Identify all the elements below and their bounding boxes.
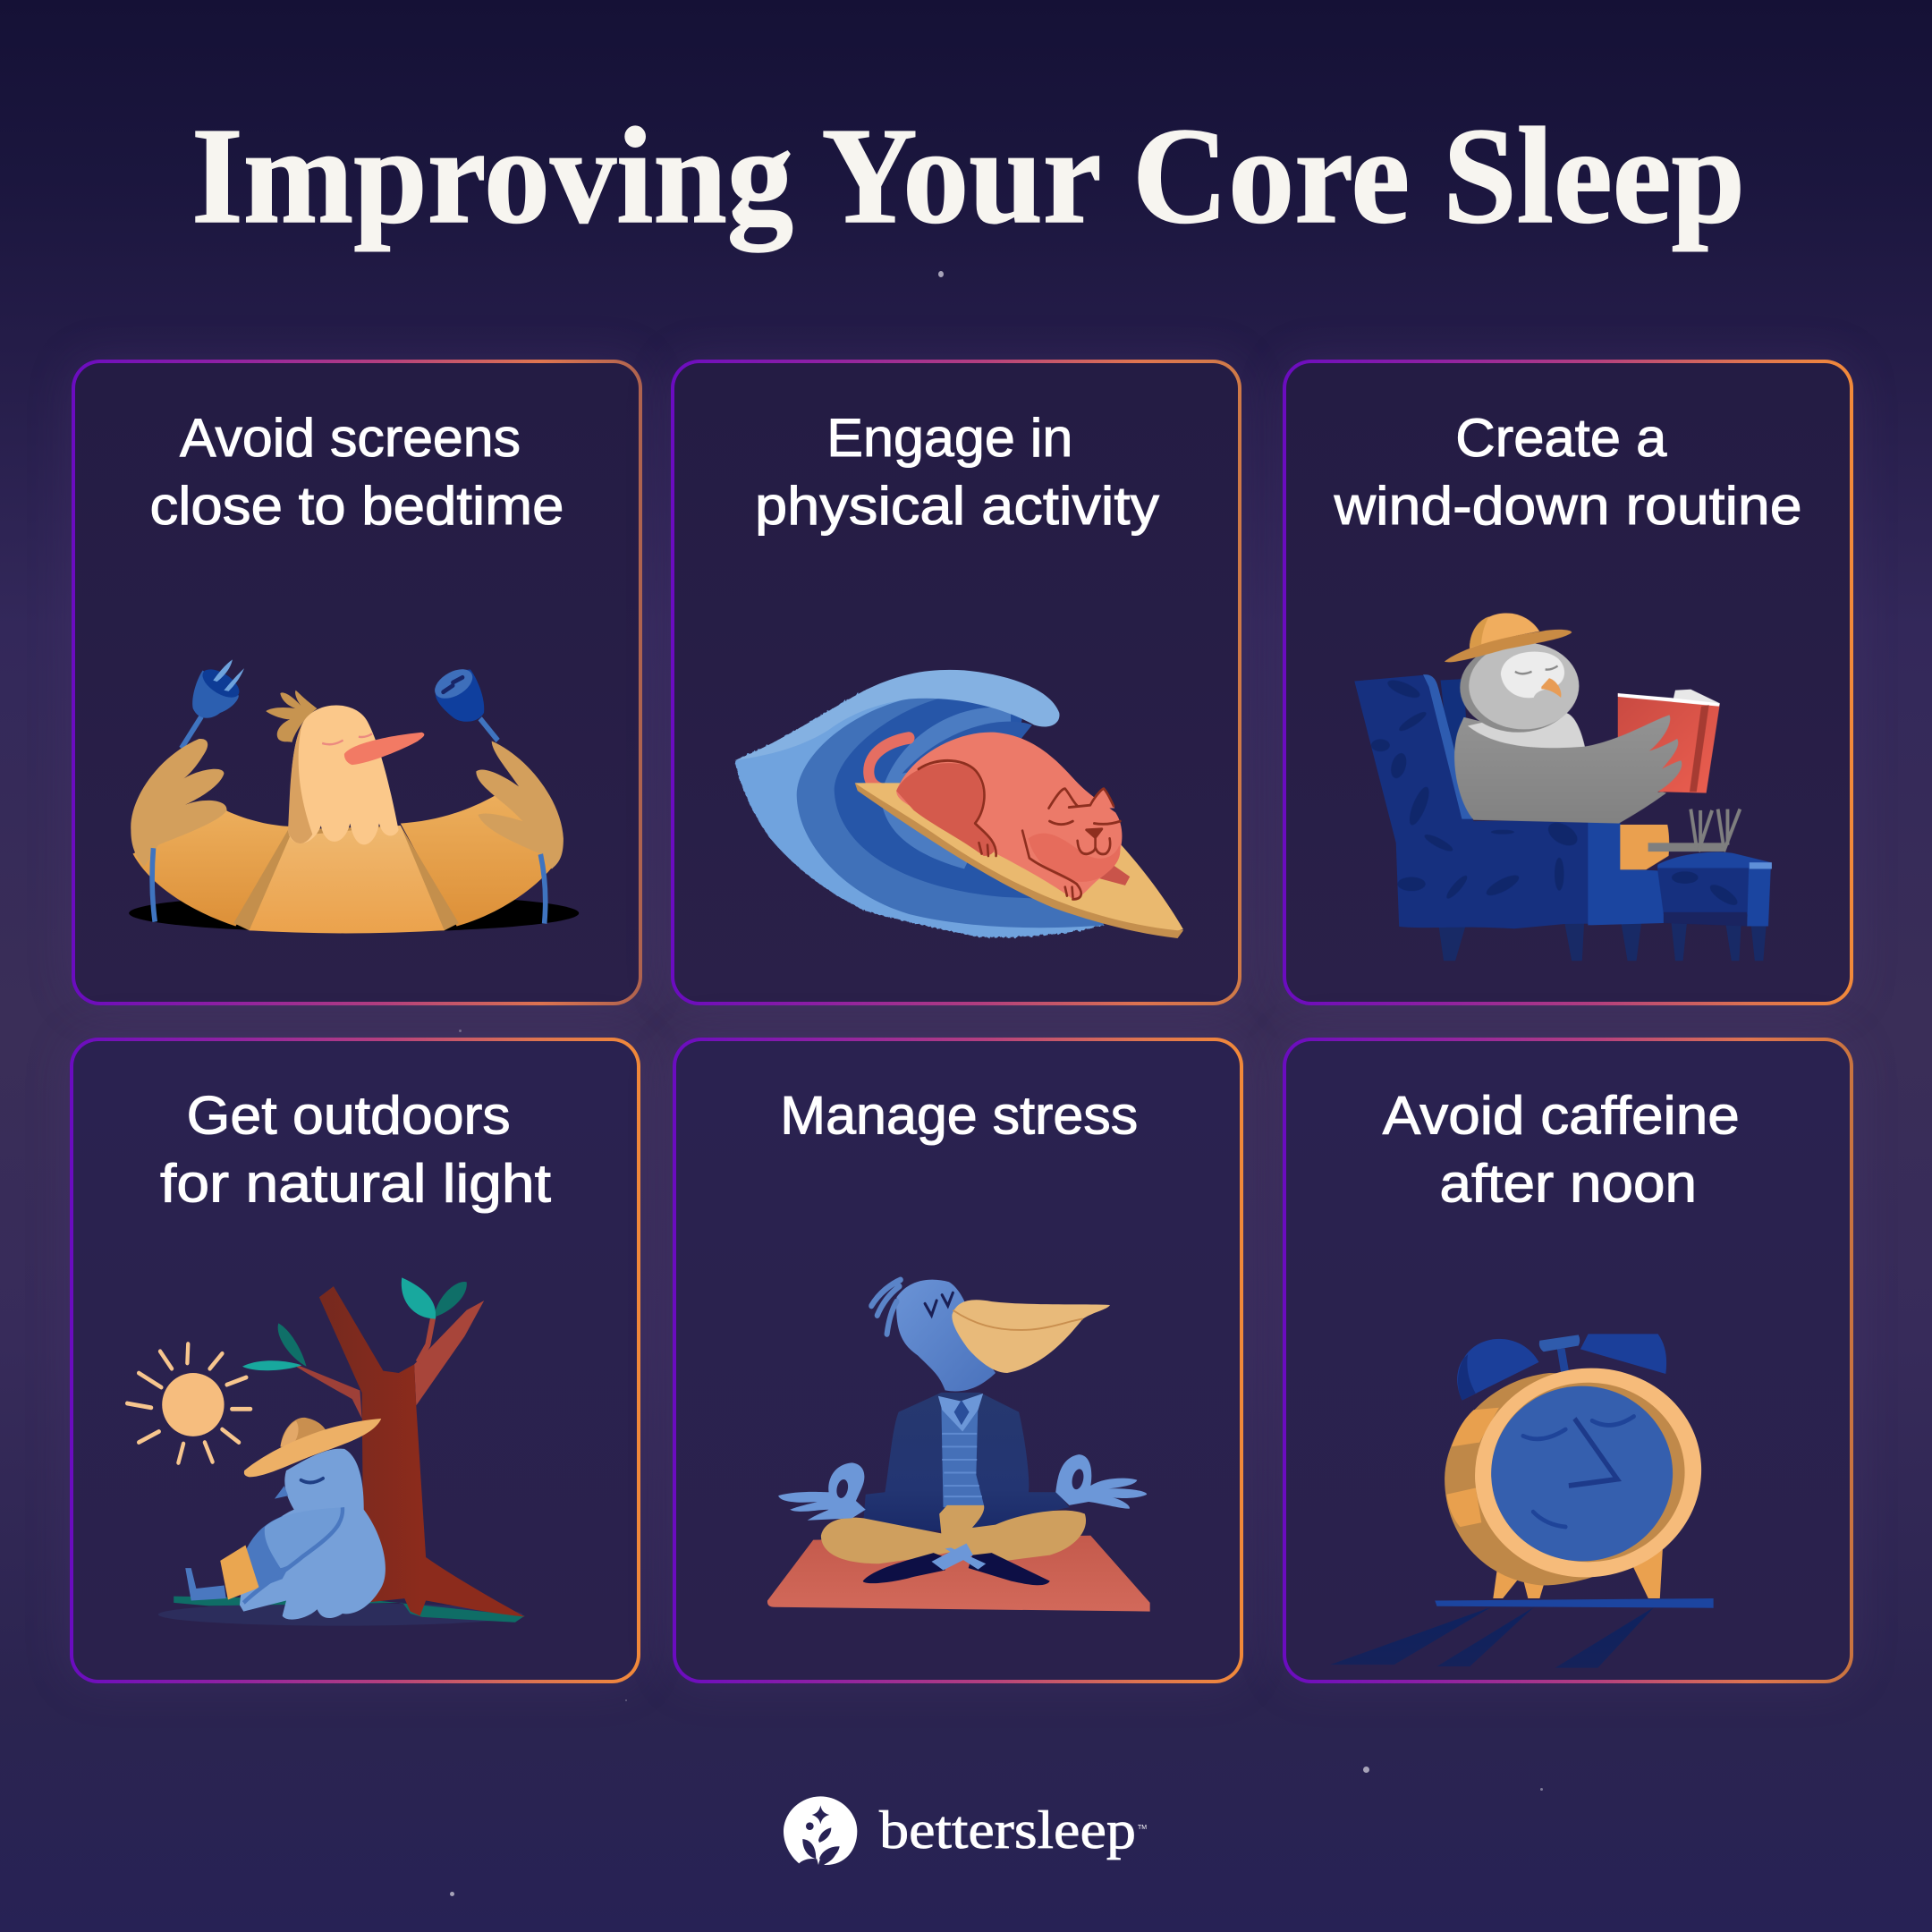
chicken head <box>288 705 399 844</box>
clock hands <box>1569 1419 1617 1486</box>
chicken comb <box>267 691 318 742</box>
bird <box>185 1449 386 1620</box>
book <box>1618 690 1720 792</box>
trademark: TM <box>1138 1825 1147 1831</box>
heading: wind-down routine: Create a <box>1455 408 1667 468</box>
clock rim <box>1469 1360 1707 1586</box>
surfboard <box>855 783 1183 938</box>
owl head <box>1460 642 1580 733</box>
chicken beak and eyes <box>323 733 425 765</box>
clock shadows <box>1330 1607 1654 1668</box>
shoes <box>863 1553 1050 1585</box>
cat line art <box>919 760 1121 899</box>
plug <box>193 659 244 718</box>
panel: avoid screens <box>72 360 642 1005</box>
wordmark: bettersleep <box>879 1801 1136 1860</box>
grass <box>174 1597 525 1623</box>
heading: manage stress: Manage stress <box>780 1086 1138 1145</box>
owl body <box>1454 715 1682 823</box>
chair legs <box>1439 921 1767 961</box>
yoga mat <box>767 1536 1150 1612</box>
heading: outdoors <box>160 1086 551 1214</box>
heading: avoid caffeine <box>1382 1086 1740 1214</box>
clock inner rim <box>1492 1383 1685 1562</box>
clock bells <box>1457 1334 1666 1401</box>
heading: outdoors: Get outdoors <box>187 1086 511 1145</box>
star <box>1540 1788 1543 1791</box>
beak <box>952 1300 1110 1373</box>
sweater <box>941 1402 984 1507</box>
owl shorts <box>1621 825 1669 869</box>
cat tail <box>869 738 910 792</box>
illustration: meditating pelican <box>767 1277 1150 1612</box>
illustration: sleeping alarm clock <box>1331 1334 1714 1667</box>
owl hat <box>1445 613 1572 662</box>
heading: physical activity: physical activity <box>755 476 1159 536</box>
upper power cords <box>182 716 498 749</box>
heading: wind-down routine: wind-down routine <box>1334 476 1802 536</box>
panel: outdoors <box>70 1038 640 1683</box>
chicken wings <box>133 795 562 926</box>
heading: outdoors: for natural light <box>160 1154 551 1214</box>
cat <box>896 732 1130 899</box>
heading: physical activity <box>755 408 1160 536</box>
sun <box>127 1344 250 1462</box>
leaves <box>242 1277 467 1370</box>
left hand mudra <box>778 1462 866 1521</box>
crossed feet <box>931 1543 986 1571</box>
panel: wind-down routine <box>1283 360 1853 1005</box>
heading: avoid caffeine: Avoid caffeine <box>1383 1086 1740 1145</box>
socket <box>431 663 485 722</box>
star <box>938 271 944 277</box>
panel: physical activity <box>671 360 1241 1005</box>
chair leaf pattern <box>1371 676 1580 901</box>
chicken body <box>234 826 459 933</box>
panel: avoid caffeine <box>1283 1038 1853 1683</box>
armchair <box>1354 674 1664 928</box>
crest <box>871 1280 901 1334</box>
footstool <box>1657 852 1772 926</box>
owl chest <box>1468 713 1585 748</box>
logo: bettersleep <box>784 1796 1147 1865</box>
logo icon <box>784 1796 857 1865</box>
ground line <box>1435 1598 1714 1608</box>
illustration: cat surfing a wave <box>735 669 1183 939</box>
closed eyes <box>925 1292 953 1316</box>
star <box>450 1892 454 1896</box>
heading: avoid screens <box>150 408 564 536</box>
illustration: bird resting under tree with sun <box>125 1277 524 1626</box>
heading: wind-down routine <box>1333 408 1802 536</box>
wave <box>734 670 1104 937</box>
straw hat <box>244 1418 381 1477</box>
ground shadow <box>158 1603 523 1626</box>
illustration: owl reading in armchair <box>1354 614 1772 961</box>
star <box>625 1699 627 1701</box>
crossed legs <box>821 1505 1086 1563</box>
sleeping face <box>1523 1417 1634 1527</box>
right hand mudra <box>1055 1454 1147 1509</box>
heading: physical activity: Engage in <box>826 408 1072 468</box>
pelican head <box>896 1280 996 1392</box>
tree <box>296 1286 525 1616</box>
illustration: chicken holding unplugged cords <box>129 660 580 934</box>
jacket <box>863 1393 1069 1531</box>
star <box>459 1030 462 1032</box>
owl legs and feet <box>1648 809 1741 852</box>
chicken hands <box>131 739 564 869</box>
clock hammer <box>1539 1335 1580 1373</box>
heading: avoid screens: close to bedtime <box>150 476 564 536</box>
collar and tie <box>938 1394 983 1431</box>
star <box>1363 1767 1369 1773</box>
heading: avoid caffeine: after noon <box>1440 1154 1697 1214</box>
heading: avoid screens: Avoid screens <box>180 408 521 468</box>
clock feet <box>1493 1549 1663 1598</box>
clock body <box>1445 1373 1619 1585</box>
panel: manage stress <box>673 1038 1243 1683</box>
lower power cords <box>152 848 546 923</box>
clock face <box>1491 1386 1673 1561</box>
hole <box>130 894 580 932</box>
